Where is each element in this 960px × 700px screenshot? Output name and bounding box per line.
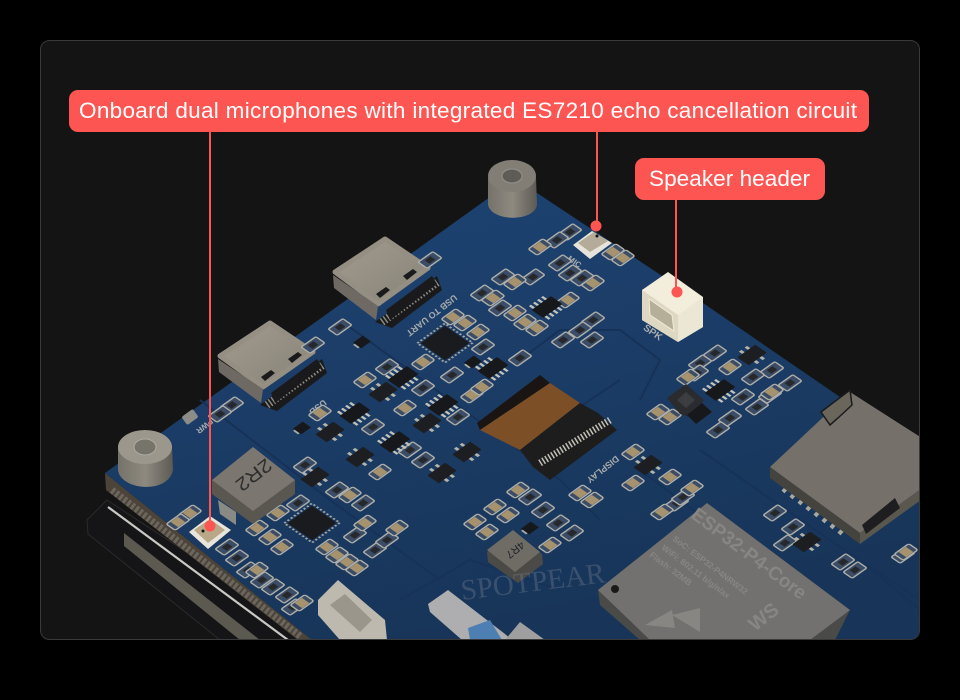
label: speaker header <box>635 158 825 200</box>
inductor 2R2 <box>212 447 295 525</box>
JST connector <box>318 580 387 640</box>
tact switch <box>667 384 712 424</box>
FPC ribbon cable <box>428 590 545 640</box>
transistors <box>297 342 825 555</box>
leader line to top microphone <box>590 131 602 232</box>
leader line to left microphone <box>204 131 216 532</box>
watermark: SPOTPEAR <box>459 557 607 607</box>
ESP32-P4-Core module <box>598 503 850 640</box>
display frame under the board <box>87 473 320 640</box>
SOIC chips <box>335 293 740 456</box>
QFN chips <box>284 323 473 543</box>
silkscreen labels <box>194 254 665 485</box>
small diodes <box>291 336 539 535</box>
USB-C connector: USB <box>218 323 327 411</box>
speaker header <box>642 272 703 342</box>
silkscreen labels: PWR <box>194 417 215 435</box>
inductor 2R2: 2R2 <box>231 454 275 495</box>
inductor 4R7 <box>487 530 543 583</box>
ESP32-P4-Core module: WS <box>745 599 783 636</box>
ESP32-P4-Core module: Flash: 32MB <box>648 550 694 588</box>
silkscreen labels: MIC <box>566 254 583 270</box>
ESP32-P4-Core module: WiFi: 802.11 b/g/n/ax <box>660 543 732 601</box>
USB-C connector: UART <box>333 239 442 328</box>
resistor pads <box>208 224 915 615</box>
silkscreen labels: SPK <box>641 323 665 344</box>
ESP32-P4-Core module: SoC: ESP32-P4NRW32 <box>671 534 750 597</box>
standoff: left <box>118 430 173 487</box>
silkscreen labels: USB TO UART <box>404 293 459 338</box>
standoff: top <box>488 160 537 218</box>
label: speaker header: Speaker header <box>649 166 810 191</box>
capacitors <box>166 239 918 611</box>
power LED <box>182 410 198 424</box>
microphone: left <box>189 516 231 549</box>
ESP32-P4-Core module: ESP32-P4-Core <box>687 504 810 604</box>
microSD slot <box>770 390 925 544</box>
microphone: top <box>573 231 612 259</box>
circuit board <box>105 178 960 640</box>
silkscreen labels: DISPLAY <box>585 454 621 485</box>
callout: dual microphones <box>69 90 869 532</box>
inductor 4R7: 4R7 <box>503 538 526 560</box>
leader line to speaker header <box>672 199 682 298</box>
silkscreen labels: USB <box>307 398 328 417</box>
label: microphones <box>69 90 869 132</box>
FPC display connector <box>477 375 617 480</box>
label: microphones: Onboard dual microphones with integrated ES7210 echo cancellation circuit <box>79 98 858 123</box>
callout: speaker header <box>635 158 825 298</box>
